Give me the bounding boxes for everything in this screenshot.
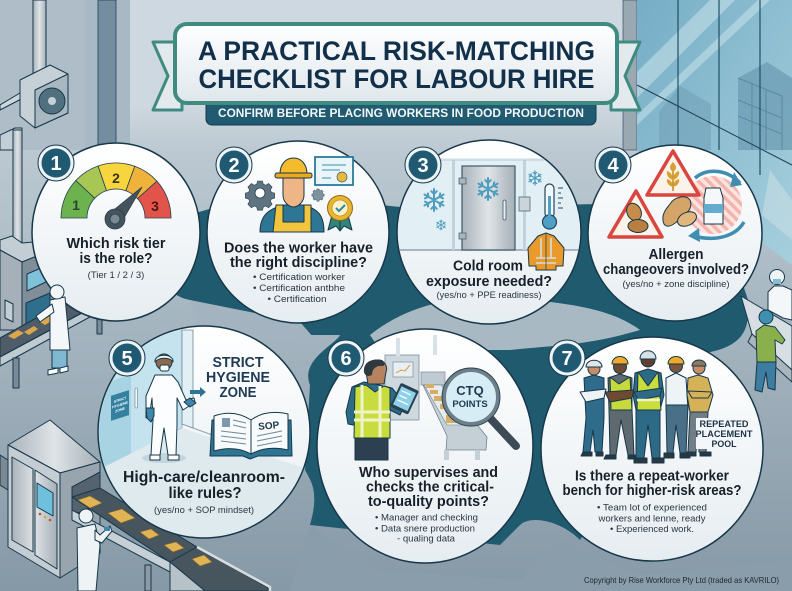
icon: thermometer [542, 184, 563, 229]
circle 1 [32, 143, 200, 321]
icon: nut [675, 209, 699, 229]
heading 7: bench for higher-risk areas? [562, 483, 742, 499]
icon: orange jacket [528, 233, 564, 270]
badge 5 [109, 340, 145, 376]
icon: door snowflake [478, 178, 498, 200]
icon: changeover arrows [688, 171, 744, 242]
icon: certificate [315, 157, 353, 185]
badge 6 [328, 340, 364, 376]
circle 3 [397, 140, 581, 324]
worker d [664, 356, 690, 458]
icon: peanut [663, 197, 691, 226]
icon: snowflake large [424, 189, 444, 211]
heading 6: Who supervises and [359, 465, 498, 481]
badge 1 [38, 145, 74, 181]
heading 5: like rules? [168, 485, 242, 502]
pool label: REPEATED [700, 419, 749, 430]
title banner [153, 24, 640, 125]
icon: risk gauge: 1 [72, 197, 80, 213]
icon: worker [260, 158, 324, 232]
badge 3 [405, 147, 441, 183]
heading 6: to-quality points? [368, 494, 489, 510]
panel 7: repeat worker bench [541, 337, 763, 561]
notes 6: • Manager and checking [375, 512, 478, 524]
icon: SOP book: SOP [258, 420, 280, 433]
badge 2: 2 [228, 155, 240, 177]
icon: magnifier [442, 368, 516, 446]
title text: A PRACTICAL RISK-MATCHING [198, 36, 595, 66]
panel 5: high care [98, 326, 310, 540]
badge 3: 3 [417, 155, 429, 177]
title plaque [175, 24, 617, 103]
heading 3: exposure needed? [426, 274, 552, 290]
note 1: (Tier 1 / 2 / 3) [88, 270, 144, 281]
icon: snowflake right [529, 171, 541, 185]
circle 2 [207, 141, 389, 323]
icon: wheat warning triangle [647, 151, 699, 195]
icon: magnifier: POINTS [452, 399, 488, 410]
note 3: (yes/no + PPE readiness) [436, 290, 542, 301]
badge 4: 4 [607, 155, 619, 177]
panel 6: supervision [317, 329, 533, 563]
icon: magnifier: CTQ [456, 383, 484, 398]
note 4: (yes/no + zone discipline) [622, 279, 730, 290]
note 5: (yes/no + SOP mindset) [154, 505, 254, 516]
heading 3: Cold room [453, 258, 523, 274]
badge 7 [549, 340, 585, 376]
icon: medal [328, 196, 352, 231]
badge 4 [595, 147, 631, 183]
worker a [580, 360, 606, 456]
icon: entry arrow [190, 387, 206, 397]
circle 5 [98, 326, 310, 538]
notes 7: workers and lenne, ready [597, 514, 706, 524]
heading 4: changeovers involved? [603, 262, 749, 278]
circle 4 [588, 145, 762, 321]
notes 2: • Certification worker [253, 272, 345, 283]
pool label: PLACEMENT [696, 429, 753, 440]
notes 7: • Experienced work. [610, 524, 694, 535]
scenery: left machine and conveyor [0, 130, 110, 388]
notes 2: • Certification antbhe [253, 283, 345, 294]
zone label: HYGIENE [206, 370, 270, 386]
icon: strict hygiene sign [111, 390, 129, 421]
icon: strict hygiene sign: HYGIENE [112, 400, 128, 410]
subtitle bar: CONFIRM BEFORE PLACING WORKERS IN FOOD PRODUCTION [218, 106, 584, 120]
icon: snowflake small [437, 220, 445, 230]
worker b [604, 356, 635, 459]
heading 1: Which risk tier [66, 236, 166, 252]
zone label: ZONE [220, 385, 257, 401]
heading 2: Does the worker have [224, 240, 373, 256]
scenery: wall columns [0, 0, 637, 150]
icon: risk gauge [61, 163, 171, 229]
notes 6: • Data snere production [375, 524, 475, 534]
badge 1: 1 [50, 153, 62, 175]
icon: SOP book [210, 412, 292, 459]
badge 6: 6 [340, 348, 352, 370]
scenery: light floor lobes [190, 298, 792, 591]
icon: large gear [245, 181, 275, 210]
heading 6: checks the critical- [366, 480, 494, 496]
pool label: POOL [712, 439, 737, 450]
panel 1: risk tier [32, 143, 200, 321]
icon: gear hole [255, 188, 265, 198]
scenery: bottom-left worker [77, 509, 112, 591]
icon: almond warning triangle [609, 191, 662, 237]
ribbon tails [153, 42, 640, 110]
icon: strict hygiene sign: ZONE [115, 406, 125, 414]
icon: milk carton [704, 188, 723, 224]
scenery: bottom-left machine [0, 420, 100, 578]
icon: striped changeover disc [684, 176, 742, 234]
badge 2 [216, 147, 252, 183]
worker c [633, 351, 664, 463]
notes 2: • Certification [268, 294, 326, 305]
icon: team of workers [580, 351, 713, 463]
circle 7 [541, 337, 763, 561]
subtitle bar [206, 92, 596, 125]
icon: tablet [390, 383, 419, 415]
pool label [696, 418, 753, 450]
worker e [686, 360, 713, 456]
notes 6: - qualing data [397, 534, 456, 544]
scenery: window with city view [637, 0, 792, 265]
badge 5: 5 [121, 348, 133, 370]
icon: strict hygiene sign: STRICT [114, 396, 127, 404]
background machine [385, 335, 445, 420]
notes 7: • Team lot of experienced [597, 502, 707, 514]
conveyor [423, 384, 487, 460]
heading 5: High-care/cleanroom- [123, 469, 285, 486]
scenery: right-hand line and workers [741, 270, 792, 392]
icon: supervisor [346, 360, 405, 460]
cleanroom doorway [98, 330, 310, 540]
cold room wall and door [390, 158, 590, 250]
scenery: ventilation unit and pipes [0, 0, 68, 150]
zone label: STRICT [212, 355, 264, 371]
panel 2: right discipline [207, 141, 389, 323]
icon: small gear [312, 189, 324, 201]
scenery: left worker in white coat [36, 285, 70, 375]
scenery: teal flowing band [165, 199, 748, 545]
heading 7: Is there a repeat-worker [575, 468, 729, 484]
heading 2: the right discipline? [230, 255, 367, 271]
panel 4: allergens [588, 145, 762, 321]
title text: CHECKLIST FOR LABOUR HIRE [198, 64, 594, 94]
circle 6 [317, 329, 533, 563]
icon: cleanroom worker [142, 354, 196, 463]
heading 4: Allergen [648, 247, 704, 263]
icon: risk gauge: 3 [151, 198, 159, 214]
panel 3: cold room [390, 140, 590, 324]
heading 1: is the role? [80, 251, 153, 267]
scenery: bottom conveyor with trays [72, 488, 270, 591]
badge 7: 7 [561, 348, 573, 370]
icon: risk gauge: 2 [112, 170, 120, 186]
